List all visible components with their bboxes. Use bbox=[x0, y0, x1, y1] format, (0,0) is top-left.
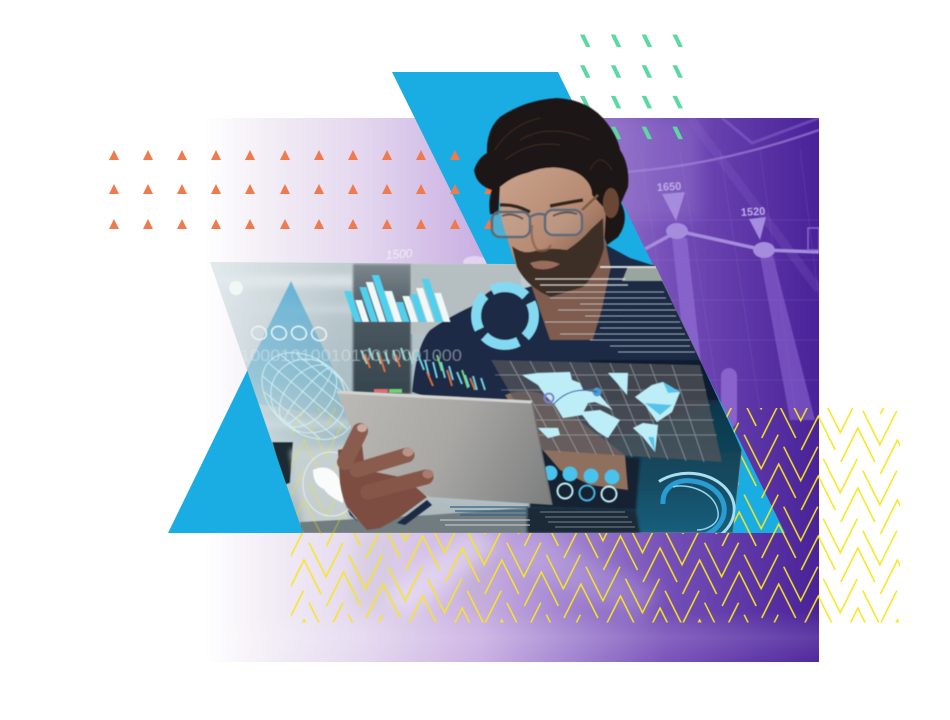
fingertips bbox=[357, 424, 367, 432]
faint chart in purple panel: 1500 bbox=[385, 246, 413, 262]
tablet bbox=[337, 392, 552, 505]
coffee cup bbox=[272, 442, 293, 485]
dark column behind the glass bbox=[353, 264, 411, 394]
sleeve bbox=[397, 500, 432, 525]
palm bbox=[338, 445, 427, 530]
upper right glass strip bbox=[622, 266, 664, 281]
small earth hologram bbox=[302, 450, 349, 518]
left hand holding tablet bbox=[338, 424, 434, 530]
desk surface bbox=[290, 445, 350, 533]
faint chart in purple panel: 1650 bbox=[657, 181, 682, 194]
dark area under map bbox=[530, 450, 640, 510]
blue parallelogram and triangle backdrop bbox=[168, 72, 785, 533]
binary digits: 1000101001010010001000 bbox=[240, 346, 462, 365]
bar chart bbox=[344, 275, 450, 322]
yellow zigzag pattern bbox=[291, 408, 900, 623]
four small rings bbox=[250, 324, 328, 343]
purple gradient background panel bbox=[205, 118, 819, 662]
continents bbox=[522, 372, 680, 452]
photo panel: man with holographic glass screen bbox=[205, 245, 750, 535]
other hand behind world map bbox=[505, 391, 628, 490]
world map hologram panel bbox=[491, 360, 722, 462]
man: hair, face and beard bbox=[474, 98, 655, 342]
eyes bbox=[502, 212, 577, 219]
faint chart in purple panel: 1520 bbox=[741, 206, 766, 219]
glasses bbox=[492, 195, 598, 237]
overlay graphics on the glass bbox=[229, 266, 695, 533]
nose shadow bbox=[532, 225, 551, 251]
wireframe globe bbox=[261, 352, 350, 440]
gauge arcs bbox=[659, 473, 734, 541]
face bbox=[500, 168, 606, 294]
lower right dark teal area bbox=[530, 395, 742, 533]
faint yellow zigzags through glass bbox=[291, 408, 346, 533]
shirt bbox=[412, 265, 718, 404]
hair strands bbox=[495, 118, 612, 170]
hair bbox=[474, 98, 628, 245]
blue triangle seen through the glass bbox=[247, 281, 346, 418]
neck and chest bbox=[530, 240, 612, 340]
ear bbox=[603, 188, 619, 218]
pie chart row bbox=[542, 466, 620, 502]
data streak on table bbox=[440, 507, 635, 527]
lips bbox=[530, 261, 560, 269]
glass streaks bbox=[250, 274, 354, 430]
eyebrows bbox=[500, 200, 583, 212]
glowing spot bbox=[229, 281, 243, 295]
faint chart in purple panel bbox=[385, 118, 819, 428]
orange triangle dots bbox=[109, 150, 494, 229]
flight path bbox=[553, 390, 597, 405]
beard bbox=[512, 218, 604, 297]
green dash pattern bbox=[580, 34, 683, 139]
code text lines on chest bbox=[535, 279, 695, 352]
candlestick chart bbox=[361, 348, 485, 390]
circular arrows ring bbox=[476, 287, 534, 345]
